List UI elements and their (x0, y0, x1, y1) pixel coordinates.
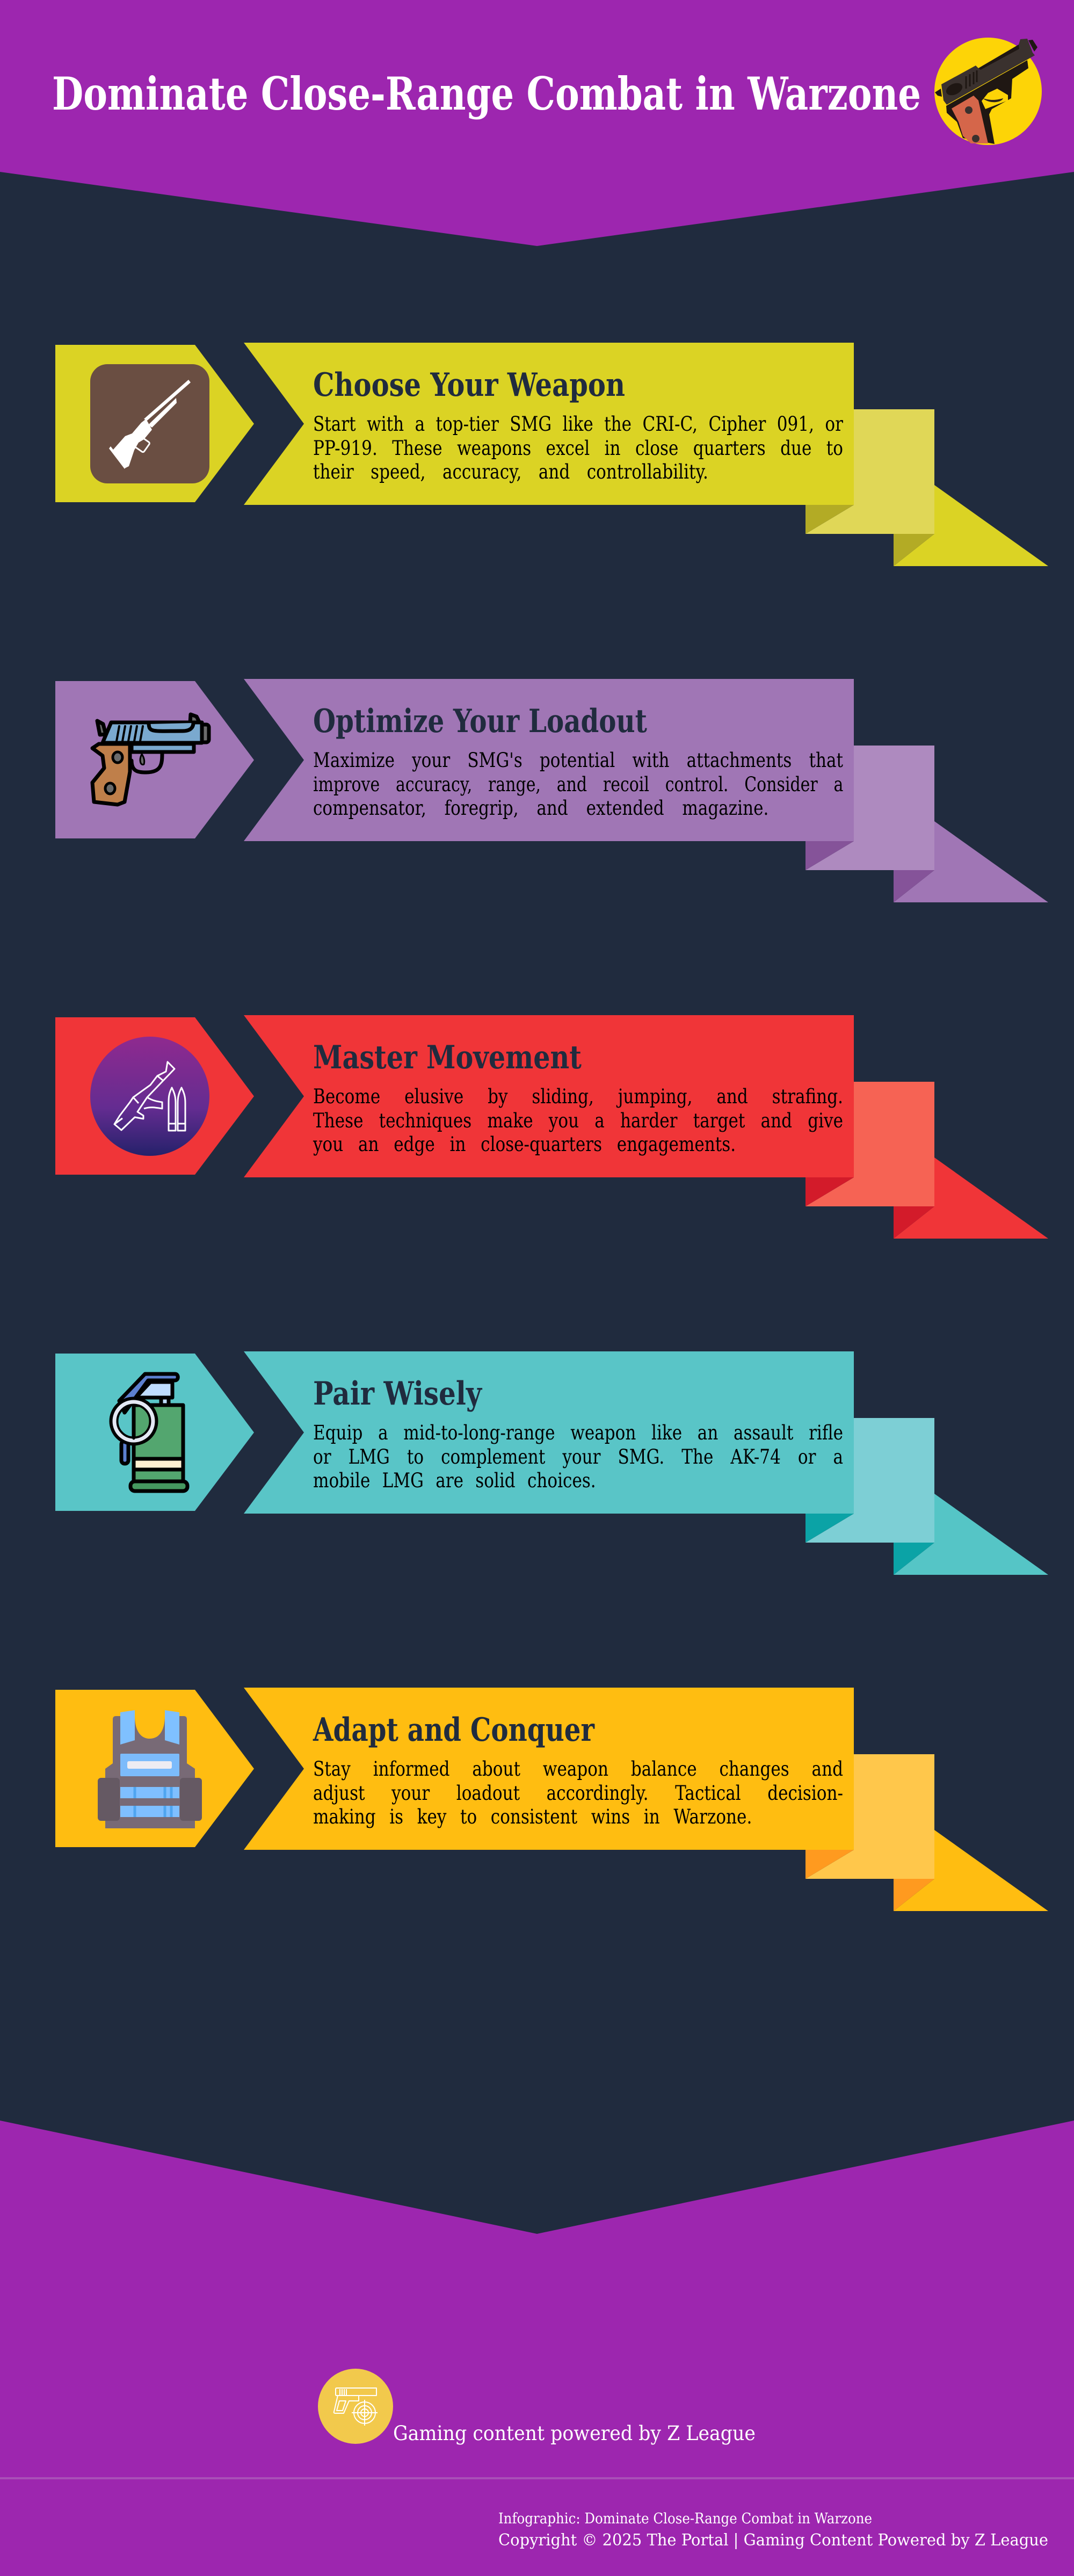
body text: Equip a mid-to-long-range weapon like an assault rifle (313, 1421, 843, 1444)
chevron icon tab (55, 681, 254, 838)
body text: Start with a top-tier SMG like the CRI-C, Cipher 091, or (313, 413, 843, 436)
icon: grenade (114, 1374, 187, 1491)
body text: making is key to consistent wins in Warzone. (313, 1805, 752, 1828)
body text: Stay informed about weapon balance changes and (313, 1757, 843, 1781)
heading: Optimize Your Loadout (313, 703, 647, 740)
body text (313, 413, 843, 483)
chevron icon tab (55, 1354, 254, 1511)
panel: step 1 choose your weapon (55, 343, 1048, 566)
fold ribbon tail (806, 1418, 1048, 1575)
body text: improve accuracy, range, and recoil control. Consider a (313, 773, 843, 796)
heading: Adapt and Conquer (313, 1711, 595, 1749)
banner (244, 1688, 854, 1850)
fold ribbon tail (806, 1754, 1048, 1911)
body text (313, 1085, 843, 1156)
icon: rifle (90, 364, 209, 483)
body text (313, 749, 843, 820)
panel: step 2 optimize your loadout (55, 679, 1048, 902)
fold ribbon tail (806, 409, 1048, 566)
body text: you an edge in close-quarters engagements. (313, 1133, 736, 1156)
icon: assault rifle and bullets (90, 1037, 209, 1156)
panel: step 3 master movement (55, 1015, 1048, 1239)
chevron icon tab (55, 1690, 254, 1847)
header band (0, 0, 1074, 246)
body text: or LMG to complement your SMG. The AK-74 or a (313, 1445, 843, 1468)
icon: tactical vest (98, 1710, 202, 1828)
banner (244, 1351, 854, 1514)
body text: mobile LMG are solid choices. (313, 1469, 596, 1492)
body text: Maximize your SMG's potential with attachments that (313, 749, 843, 772)
panel: step 5 adapt and conquer (55, 1688, 1048, 1911)
fold ribbon tail (806, 746, 1048, 902)
body text (313, 1757, 843, 1828)
body text: Become elusive by sliding, jumping, and strafing. (313, 1085, 843, 1108)
body text (313, 1421, 843, 1492)
chevron icon tab (55, 345, 254, 502)
panel: step 4 pair wisely (55, 1351, 1048, 1575)
body text: These techniques make you a harder target and give (313, 1109, 843, 1132)
icon: header pistol in yellow circle (934, 38, 1042, 145)
heading: Choose Your Weapon (313, 366, 625, 404)
banner (244, 679, 854, 841)
body text: PP-919. These weapons excel in close quarters due to (313, 437, 843, 460)
icon: blue pistol (92, 714, 209, 805)
body text: their speed, accuracy, and controllability. (313, 460, 708, 483)
heading: Pair Wisely (313, 1375, 483, 1413)
footer band (0, 2121, 1074, 2576)
icon: pistol and target badge (318, 2369, 393, 2444)
body text: adjust your loadout accordingly. Tactical decision- (313, 1782, 843, 1805)
banner (244, 343, 854, 505)
banner (244, 1015, 854, 1177)
chevron icon tab (55, 1017, 254, 1175)
body text: compensator, foregrip, and extended magazine. (313, 797, 768, 820)
heading: Master Movement (313, 1039, 582, 1076)
fold ribbon tail (806, 1082, 1048, 1239)
footer copyright: Copyright © 2025 The Portal | Gaming Content Powered by Z League (498, 2531, 1048, 2550)
